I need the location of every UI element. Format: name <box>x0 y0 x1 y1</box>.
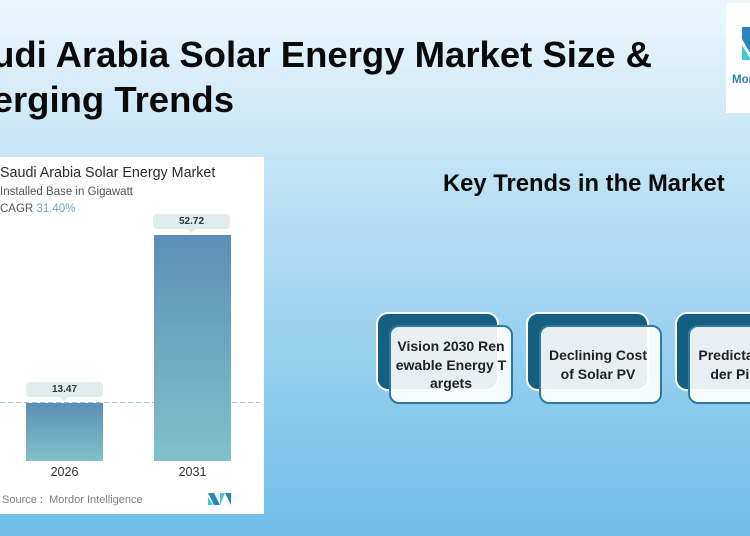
card 3 front <box>688 325 750 404</box>
heading: key trends: Key Trends in the Market <box>443 170 725 197</box>
card 3 <box>675 312 750 404</box>
chart title: Saudi Arabia Solar Energy Market <box>0 165 215 181</box>
card 2 <box>526 312 662 404</box>
card 2 text: Declining Cost <box>549 347 647 363</box>
card 1 text <box>396 338 506 391</box>
bar 2031 <box>154 235 231 461</box>
pointer 13.47 <box>60 397 68 401</box>
card 2 front <box>539 325 662 404</box>
label 52.72 <box>153 214 230 229</box>
bar 2026 <box>26 403 103 461</box>
label 13.47: 13.47 <box>52 384 77 395</box>
logo card <box>726 3 750 113</box>
card 1 text: ewable Energy T <box>396 356 506 372</box>
card 1 <box>376 312 513 404</box>
card 1 back <box>376 312 499 391</box>
year 2026: 2026 <box>51 465 78 479</box>
chart subtitle: Installed Base in Gigawatt <box>0 186 133 198</box>
label 52.72: 52.72 <box>179 216 204 227</box>
pointer 52.72 <box>187 229 195 233</box>
card 1 text: argets <box>430 375 472 391</box>
label 13.47 <box>26 382 103 397</box>
card 2 text: of Solar PV <box>561 366 635 382</box>
CAGR: CAGR 31.40% <box>0 203 75 215</box>
card 3 text <box>698 347 750 382</box>
year 2031: 2031 <box>179 465 206 479</box>
card 2 back <box>526 312 649 391</box>
icon: logo mark <box>742 27 750 60</box>
reference dashed line <box>0 402 259 403</box>
card 1 text: Vision 2030 Ren <box>397 338 505 354</box>
card 3 back <box>675 312 750 391</box>
panel: chart <box>0 157 264 514</box>
card 1 front <box>389 325 513 404</box>
icon: small logo <box>208 493 231 505</box>
source: Source : Mordor Intelligence <box>2 494 143 506</box>
card 2 text <box>549 347 647 382</box>
